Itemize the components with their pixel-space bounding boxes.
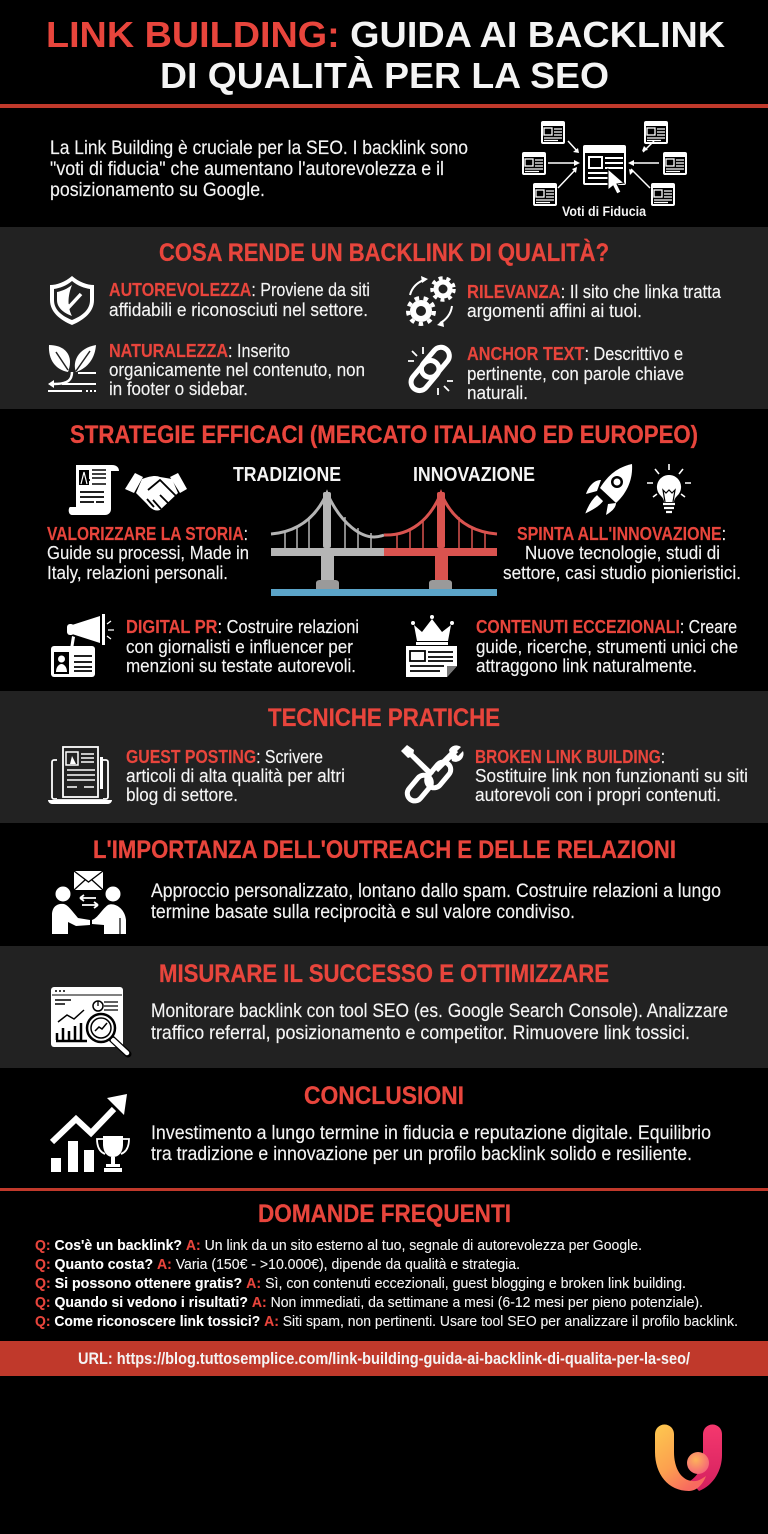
faq 1: Q: Cos'è un backlink? A: Un link da un sito esterno al tuo, segnale di autorevolezza per Google. <box>35 1237 642 1254</box>
text block: conclusioni: Investimento a lungo termine in fiducia e reputazione digitale. Equilibrio <box>151 1122 711 1144</box>
icon: guest post laptop <box>48 747 112 804</box>
icon: leaves <box>48 345 96 391</box>
text: broken link building: autorevoli con i propri contenuti. <box>475 784 721 805</box>
panel: strategie efficaci <box>47 421 741 677</box>
faq 2: Q: Quanto costa? A: Varia (150€ - >10.000€), dipende da qualità e strategia. <box>35 1256 520 1273</box>
heading: L'IMPORTANZA DELL'OUTREACH E DELLE RELAZIONI <box>93 836 676 864</box>
panel: cosa rende un backlink di qualità <box>0 227 768 409</box>
heading: STRATEGIE EFFICACI (MERCATO ITALIANO ED EUROPEO) <box>70 421 698 449</box>
text: digital pr: menzioni su testate autorevoli. <box>126 655 356 676</box>
icon: handshake <box>125 473 187 511</box>
text block: misurare <box>151 1000 728 1044</box>
panel: conclusioni <box>51 1082 711 1172</box>
text: spinta all'innovazione <box>503 523 741 583</box>
url bar <box>0 1341 768 1376</box>
text: spinta all'innovazione: SPINTA ALL'INNOVAZIONE: <box>517 523 726 544</box>
text: anchor text: ANCHOR TEXT: Descrittivo e <box>467 343 683 364</box>
text: naturalezza <box>109 340 365 399</box>
icon: shield <box>50 276 94 325</box>
text: contenuti eccezionali: guide, ricerche, strumenti unici che <box>476 636 738 657</box>
intro text: posizionamento su Google. <box>50 179 265 201</box>
text: guest posting: GUEST POSTING: Scrivere <box>126 746 323 767</box>
logo <box>655 1424 722 1491</box>
text: broken link building: Sostituire link non funzionanti su siti <box>475 765 748 786</box>
text: broken link building: BROKEN LINK BUILDING: <box>475 746 665 767</box>
heading: COSA RENDE UN BACKLINK DI QUALITÀ? <box>159 238 609 267</box>
icon: gears <box>408 276 454 327</box>
panel: domande frequenti <box>35 1200 738 1330</box>
faq 4: Q: Quando si vedono i risultati? A: Non immediati, da settimane a mesi (6-12 mesi per pieno potenziale). <box>35 1294 703 1311</box>
panel: outreach <box>52 836 721 934</box>
text block: outreach: Approccio personalizzato, lontano dallo spam. Costruire relazioni a lungo <box>151 880 721 902</box>
title: LINK BUILDING: GUIDA AI BACKLINK <box>46 14 725 55</box>
text: guest posting: blog di settore. <box>126 784 238 805</box>
text: digital pr: con giornalisti e influencer per <box>126 636 353 657</box>
text: spinta all'innovazione: Nuove tecnologie, studi di <box>525 542 720 563</box>
text block: conclusioni <box>151 1122 711 1165</box>
heading: MISURARE IL SUCCESSO E OTTIMIZZARE <box>159 960 609 988</box>
text: valorizzare la storia <box>47 523 249 583</box>
text: contenuti eccezionali: CONTENUTI ECCEZIONALI: Creare <box>476 616 737 637</box>
text: naturalezza: NATURALEZZA: Inserito <box>109 340 290 361</box>
text: naturalezza: organicamente nel contenuto, non <box>109 359 365 380</box>
text: anchor text: naturali. <box>467 382 528 403</box>
heading: TECNICHE PRATICHE <box>268 704 500 732</box>
panel: tecniche pratiche <box>0 691 768 823</box>
text: rilevanza: argomenti affini ai tuoi. <box>467 300 642 321</box>
text: digital pr: DIGITAL PR: Costruire relazioni <box>126 616 359 637</box>
title: DI QUALITÀ PER LA SEO <box>160 55 609 96</box>
intro text: La Link Building è cruciale per la SEO. I backlink sono <box>50 137 468 159</box>
text: spinta all'innovazione: settore, casi studio pionieristici. <box>503 562 741 583</box>
text: anchor text: pertinente, con parole chiave <box>467 363 684 384</box>
bridge illustration <box>271 492 497 596</box>
intro text: "voti di fiducia" che aumentano l'autorevolezza e il <box>50 158 444 180</box>
icon: megaphone and badge <box>51 614 114 677</box>
text: rilevanza: RILEVANZA: Il sito che linka tratta <box>467 281 722 302</box>
icon: crown and article <box>406 615 457 677</box>
icon: rocket <box>584 464 632 515</box>
url bar: URL: https://blog.tuttosemplice.com/link-building-guida-ai-backlink-di-qualita-per-la-seo/ <box>78 1350 690 1368</box>
text: contenuti eccezionali <box>476 616 738 676</box>
text block: outreach <box>151 880 721 923</box>
text: guest posting <box>126 746 345 805</box>
text: autorevolezza: affidabili e riconosciuti nel settore. <box>109 299 368 320</box>
text: valorizzare la storia: Guide su processi, Made in <box>47 542 249 563</box>
icon: people handshake with envelope <box>52 871 126 934</box>
text: autorevolezza: AUTOREVOLEZZA: Proviene da siti <box>109 279 370 300</box>
text: naturalezza: in footer o sidebar. <box>109 378 248 399</box>
icon: analytics dashboard <box>51 987 128 1054</box>
text block: conclusioni: tra tradizione e innovazione per un profilo backlink solido e resiliente. <box>151 1143 692 1165</box>
text: broken link building <box>475 746 748 805</box>
icon: light bulb <box>647 464 691 512</box>
heading: CONCLUSIONI <box>304 1082 464 1110</box>
text block: outreach: termine basate sulla reciprocità e sul valore condiviso. <box>151 901 575 923</box>
text: digital pr <box>126 616 359 676</box>
label: tradizione: TRADIZIONE <box>233 464 341 486</box>
text: valorizzare la storia: Italy, relazioni personali. <box>47 562 228 583</box>
title <box>46 14 725 96</box>
heading: DOMANDE FREQUENTI <box>258 1200 511 1228</box>
icon: scroll <box>69 465 119 515</box>
label: innovazione: INNOVAZIONE <box>413 464 535 486</box>
text: rilevanza <box>467 281 722 321</box>
text: valorizzare la storia: VALORIZZARE LA STORIA: <box>47 523 248 544</box>
text: contenuti eccezionali: attraggono link naturalmente. <box>476 655 697 676</box>
icon: wrench and broken chain <box>401 745 464 804</box>
text: guest posting: articoli di alta qualità per altri <box>126 765 345 786</box>
faq 5: Q: Come riconoscere link tossici? A: Siti spam, non pertinenti. Usare tool SEO per analizzare il profilo backlink. <box>35 1313 738 1330</box>
text: anchor text <box>467 343 684 403</box>
icon: chain link <box>408 344 453 395</box>
text: autorevolezza <box>109 279 370 320</box>
icon: growth chart and trophy <box>51 1094 129 1172</box>
icon: network of votes: Voti di Fiducia <box>562 204 646 219</box>
panel: misurare il successo <box>0 946 768 1068</box>
text block: misurare: traffico referral, posizionamento e competitor. Rimuovere link tossici. <box>151 1022 690 1044</box>
icon: network of votes <box>522 121 687 219</box>
faq 3: Q: Si possono ottenere gratis? A: Sì, con contenuti eccezionali, guest blogging e broken link building. <box>35 1275 686 1292</box>
intro text <box>50 137 468 201</box>
